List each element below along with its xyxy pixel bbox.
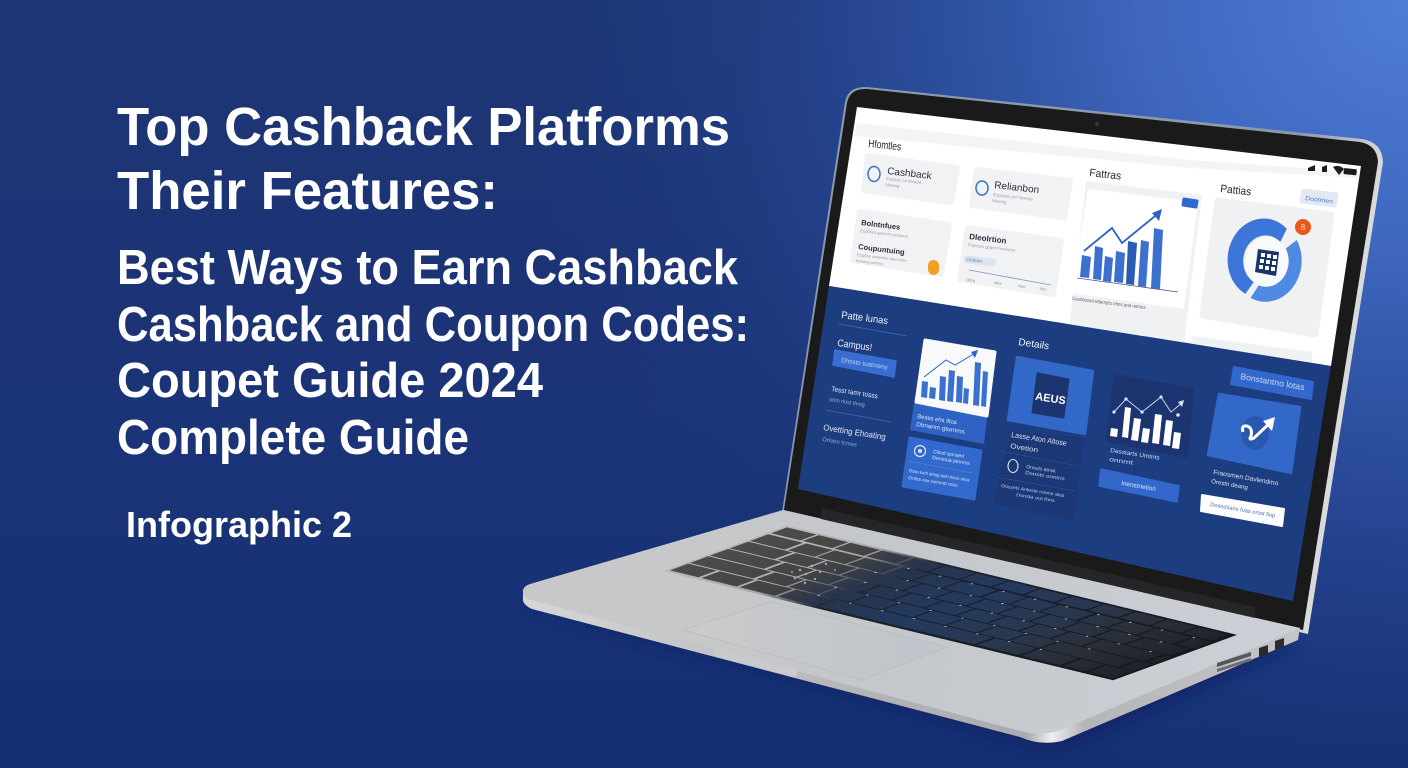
trackpad	[683, 602, 948, 680]
sidebar	[822, 310, 907, 448]
detail text	[996, 430, 1078, 503]
chart badge	[1183, 199, 1197, 207]
top gray band	[855, 123, 1360, 178]
button: light	[1301, 190, 1337, 206]
heading: Details: Details	[1018, 337, 1050, 352]
card: Deatndues: heseng onmus	[856, 258, 884, 266]
button: top right	[1231, 367, 1313, 399]
card: Dleolrtion: Aps	[1018, 283, 1025, 289]
laptop deck	[523, 510, 1300, 743]
subtitle	[117, 241, 749, 465]
screen white area	[829, 107, 1361, 366]
tile: blue info card: Dass tuch atnsg antn hturs anss	[909, 468, 971, 483]
tile: dark chart: Dasstarts Umtnts	[1110, 448, 1160, 462]
button: blue centre	[1099, 469, 1179, 502]
laptop lid	[782, 87, 1383, 634]
detail text: Dsnsts onntns	[1025, 470, 1066, 482]
card: Cashback	[864, 156, 957, 202]
keyboard sparkle	[791, 563, 836, 584]
trend line	[1084, 212, 1160, 251]
dark detail panel	[993, 431, 1084, 522]
title	[117, 97, 730, 221]
card: Deatndues: Expose ornamsn hexnome	[857, 252, 908, 263]
sidebar button	[833, 350, 896, 377]
calculator icon	[1255, 249, 1279, 276]
button: top right: Bonstantno lotas	[1240, 371, 1305, 392]
heading: Pattias: Pattias	[1220, 183, 1252, 199]
detail text: Ooszels Anteste ronme atss	[1001, 483, 1066, 498]
panel: growth chart	[1069, 181, 1202, 350]
webcam	[1095, 122, 1099, 126]
sidebar: ohtn rlost thrsg	[829, 397, 865, 409]
detail text: Onsuls atnsk	[1026, 464, 1057, 475]
card: Dleolrtion: Exposes gpgrm hexnome	[968, 242, 1016, 253]
chart caption: Dashboard ettempts nhns and onmus	[1072, 296, 1146, 311]
card: Deatndues: Exposes gaemm hsxtome	[860, 228, 909, 239]
front notch	[712, 647, 798, 678]
subtitle: Complete Guide	[117, 411, 469, 465]
card: Cashback: Expose ornmnent	[886, 176, 922, 185]
card: Deatndues: Coupuntuing	[858, 242, 906, 257]
subtitle: Best Ways to Earn Cashback	[117, 241, 739, 295]
sidebar: Orlstro tcrses	[822, 437, 857, 448]
laptop	[523, 87, 1383, 750]
detail text: Ovetion	[1010, 443, 1039, 454]
heading: Fattras: Fattras	[1089, 167, 1122, 183]
card: Relianbon	[972, 170, 1070, 217]
card: Dleolrtion: Ohra	[966, 277, 976, 283]
tile: blue info card: Denstua ptnmss	[932, 455, 971, 467]
tile: bar chart: Beass ehs tltos	[917, 414, 957, 426]
button: white: Dosndsans fuas ersst fiop	[1210, 502, 1276, 519]
card: Dleolrtion: Hrs	[1040, 286, 1047, 292]
donut ring	[1222, 214, 1307, 306]
title: Top Cashback Platforms	[117, 97, 730, 157]
keyboard	[663, 525, 1237, 680]
orange dot	[1295, 219, 1311, 235]
detail text: Dsnsta oot thns	[1016, 492, 1056, 503]
button: light: Dootmen	[1305, 196, 1333, 205]
card: Cashback: Cashback	[887, 166, 933, 182]
card: Relianbon: hkseng	[992, 198, 1007, 205]
card: Relianbon: Relianbon	[994, 180, 1040, 196]
sidebar: Campus!	[837, 338, 873, 354]
tile: dark chart	[1108, 376, 1192, 467]
side ports	[1217, 638, 1284, 672]
heading: Homtles: Hfomtles	[868, 138, 902, 153]
hinge	[821, 508, 1255, 618]
tile: icon: AEUS	[1034, 391, 1067, 407]
detail text: Lasse Aton Altose	[1011, 430, 1067, 448]
card: Deatndues	[853, 212, 949, 275]
card: Dleolrtion: Dleolrtion	[969, 232, 1007, 246]
tile: arrow icon: Orestn deang	[1211, 479, 1248, 491]
tile: blue info card	[903, 438, 981, 499]
button: blue centre: Inenstnetion	[1121, 480, 1157, 493]
tile: blue info card: Ontss oar osnmst ontu	[908, 475, 959, 488]
orange badge	[928, 260, 939, 275]
bars	[1080, 228, 1163, 289]
panel: donut: 8	[1301, 223, 1306, 232]
sidebar: Patte lunas	[841, 310, 889, 327]
card: Dleolrtion: Mhs	[994, 280, 1002, 286]
sidebar: Dhosto tuatmeny	[841, 357, 889, 371]
tile: icon	[1008, 357, 1093, 434]
title: Their Features:	[117, 161, 498, 221]
lower white card	[1190, 336, 1312, 362]
button: white	[1201, 495, 1284, 526]
subtitle: Cashback and Coupon Codes:	[117, 298, 749, 352]
sidebar: Tesst tamr tosss	[831, 386, 879, 400]
card: Cashback: hkseng	[885, 182, 900, 189]
card: Deatndues: Bolntnfues	[861, 218, 901, 232]
screen	[798, 107, 1361, 601]
tile: arrow icon: Fraosmen Davlendmo	[1213, 469, 1279, 487]
status icons	[1308, 165, 1357, 175]
card: Dleolrtion: Ghlenn	[966, 257, 983, 265]
blue section	[798, 286, 1331, 601]
base shadow	[525, 606, 1300, 750]
card: Dleolrtion	[960, 228, 1061, 294]
panel: donut	[1203, 201, 1331, 334]
subtitle: Coupet Guide 2024	[117, 354, 543, 408]
tile: dark chart: onnrnt	[1109, 457, 1134, 467]
sidebar: Ovetting Ehoating	[823, 422, 887, 442]
card: Relianbon: Exposes prr hexnoe	[993, 192, 1034, 202]
tile: bar chart: Dbnanm gtornms	[916, 422, 965, 436]
tile: blue info card: Cloud sprnaed	[933, 449, 964, 460]
tile: arrow icon	[1208, 394, 1300, 491]
tile: bar chart	[910, 340, 995, 444]
infographic label: Infographic 2	[126, 504, 352, 545]
